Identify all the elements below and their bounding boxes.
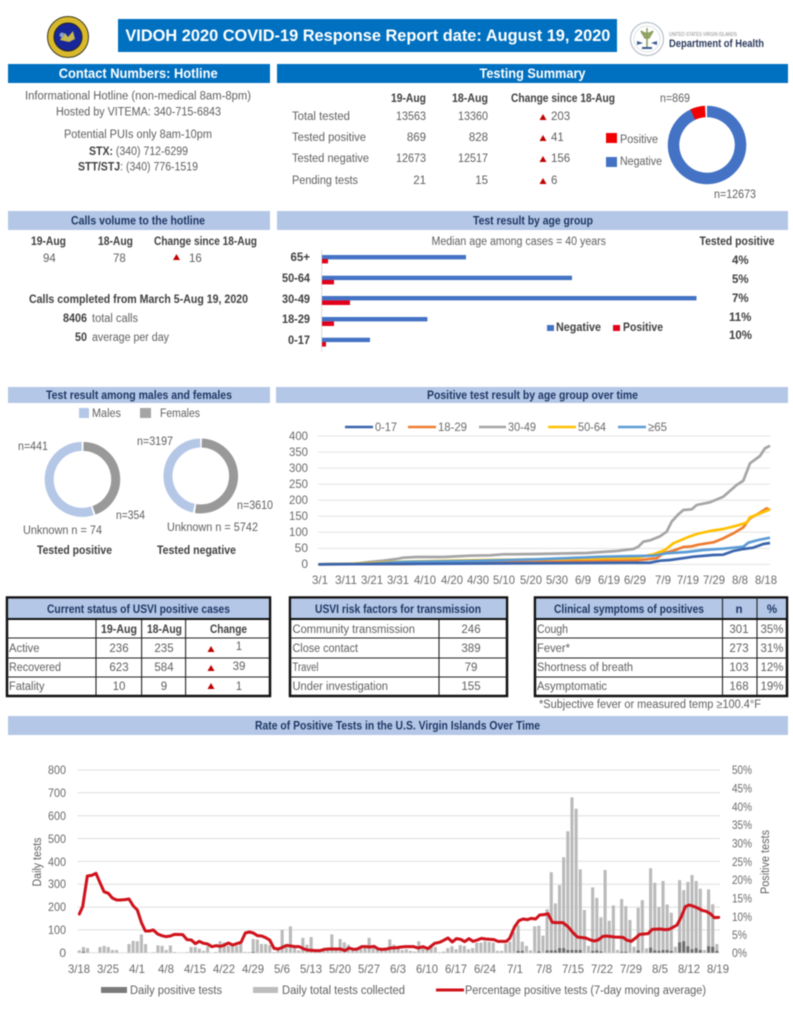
combo chart: daily tests and percent positive: 7/22 <box>591 962 613 976</box>
combo chart: daily tests and percent positive: 0% <box>732 946 747 960</box>
donut chart: tested positive: n=441 <box>18 441 48 453</box>
heading: positive by age over time: Positive test result by age group over time <box>427 390 638 402</box>
heading: males and females: Test result among males and females <box>46 390 232 402</box>
heading: contact numbers <box>8 64 270 83</box>
legend: positive and negative: Positive <box>620 134 658 146</box>
text block: calls completed: 50 <box>75 332 87 344</box>
combo chart: daily tests and percent positive: Daily tests <box>32 837 44 886</box>
table: USVI risk factors for transmission: Travel <box>292 662 318 674</box>
combo chart: daily tests and percent positive: 800 <box>48 763 66 777</box>
legend: sex: Females <box>160 408 200 420</box>
table: clinical symptoms of positives: 103 <box>729 662 749 674</box>
table: clinical symptoms of positives: Clinical symptoms of positives <box>554 604 704 616</box>
heading: males and females <box>8 387 270 403</box>
table: current status of USVI positive cases <box>7 598 270 696</box>
table: testing counts: 13563 <box>396 111 426 123</box>
legend: rate chart: Percentage positive tests (7-day moving average) <box>465 985 706 997</box>
table: current status of USVI positive cases: 10 <box>113 681 125 693</box>
heading: calls volume <box>8 211 270 230</box>
line chart: positives by age: 6/29 <box>624 573 646 587</box>
column: tested positive percentages: 5% <box>732 274 749 286</box>
table: clinical symptoms of positives: Asymptomatic <box>537 681 607 693</box>
combo chart: daily tests and percent positive: 50% <box>732 763 752 777</box>
bar chart: age groups: 50-64 <box>282 273 311 285</box>
table: USVI risk factors for transmission: Close contact <box>292 643 359 655</box>
table: current status of USVI positive cases: 236 <box>109 643 129 655</box>
legend: age groups: 0-17 <box>375 420 397 434</box>
column: tested positive percentages: 4% <box>732 255 749 267</box>
table: clinical symptoms of positives: 31% <box>760 643 784 655</box>
combo chart: daily tests and percent positive: 8/5 <box>652 962 668 976</box>
legend: age groups: 50-64 <box>578 420 606 434</box>
combo chart: daily tests and percent positive: 7/8 <box>536 962 552 976</box>
line chart: positives by age: 3/1 <box>312 573 328 587</box>
table: clinical symptoms of positives <box>535 597 787 696</box>
bar chart: age groups: Negative <box>556 322 601 334</box>
combo chart: daily tests and percent positive: 7/29 <box>620 962 642 976</box>
line chart: positives by age: 4/10 <box>414 573 436 587</box>
table: current status of USVI positive cases: Recovered <box>9 662 61 674</box>
combo chart: daily tests and percent positive: 8/12 <box>678 962 700 976</box>
combo chart: daily tests and percent positive: 500 <box>48 832 66 846</box>
combo chart: daily tests and percent positive: 20% <box>732 873 752 887</box>
combo chart: daily tests and percent positive: 6/10 <box>416 962 438 976</box>
table: clinical symptoms of positives: n <box>735 604 743 616</box>
line chart: positives by age: 8/8 <box>732 573 748 587</box>
legend: sex: Males <box>92 408 121 420</box>
heading: rate of positive tests <box>8 716 788 735</box>
table: testing counts: 6 <box>551 175 557 187</box>
legend: rate chart: Daily total tests collected <box>282 985 405 997</box>
table: daily calls: 19-Aug <box>31 236 66 248</box>
combo chart: daily tests and percent positive: 100 <box>48 923 66 937</box>
icon: left government seal <box>48 16 88 58</box>
text block: calls completed: average per day <box>92 332 169 344</box>
icon: Department of Health logo: UNITED STATES VIRGIN ISLANDS <box>669 32 738 38</box>
combo chart: daily tests and percent positive: 4/29 <box>242 962 264 976</box>
legend: rate chart: Daily positive tests <box>130 985 222 997</box>
column: tested positive percentages: 10% <box>729 330 752 342</box>
table: USVI risk factors for transmission: 155 <box>461 681 481 693</box>
table: testing counts: 41 <box>551 132 564 144</box>
text block: calls completed: total calls <box>92 313 138 325</box>
text block: calls completed: 8406 <box>63 313 87 325</box>
combo chart: daily tests and percent positive: 0 <box>59 946 66 960</box>
bar chart: age groups <box>282 250 696 352</box>
table: testing counts: 13360 <box>458 111 488 123</box>
table: daily calls: Change since 18-Aug <box>154 236 257 248</box>
panel: contact numbers hotline <box>8 64 270 174</box>
table: current status of USVI positive cases: Active <box>9 643 40 655</box>
text block: hotline numbers: STT/STJ: (340) 776-1519 <box>78 162 198 174</box>
table: current status of USVI positive cases: 1 <box>236 641 242 653</box>
line chart: positives by age: 4/30 <box>467 573 489 587</box>
line chart: positives by age: 5/20 <box>520 573 542 587</box>
combo chart: daily tests and percent positive: 7/15 <box>562 962 584 976</box>
combo chart: daily tests and percent positive: 30% <box>732 836 752 850</box>
table: testing counts <box>292 93 615 187</box>
combo chart: daily tests and percent positive: 700 <box>48 786 66 800</box>
table: current status of USVI positive cases: 623 <box>109 662 129 674</box>
bar chart: age groups: 0-17 <box>288 335 310 347</box>
line chart: positives by age: 4/20 <box>441 573 463 587</box>
combo chart: daily tests and percent positive: 45% <box>732 782 752 796</box>
bar chart: age groups: 65+ <box>290 252 310 264</box>
table: testing counts: Pending tests <box>292 175 358 187</box>
donut chart: tested positive: Tested positive <box>37 545 112 557</box>
table: daily calls: 94 <box>43 253 56 265</box>
table: current status of USVI positive cases: 235 <box>154 643 174 655</box>
line chart: positives by age: 200 <box>289 493 308 507</box>
table: daily calls: 18-Aug <box>98 236 133 248</box>
combo chart: daily tests and percent positive: 300 <box>48 877 66 891</box>
line chart: positives by age: 8/18 <box>755 573 777 587</box>
text block: hotline numbers <box>25 90 251 174</box>
table: testing counts: 828 <box>469 132 488 144</box>
title banner <box>118 19 617 52</box>
table: testing counts: Tested negative <box>292 153 369 165</box>
panel: rate of positive tests over time <box>8 716 788 997</box>
column: tested positive percentages: 7% <box>732 293 749 305</box>
combo chart: daily tests and percent positive: 4/1 <box>129 962 145 976</box>
heading: calls volume: Calls volume to the hotline <box>71 216 205 228</box>
line chart: positives by age: 100 <box>289 525 308 539</box>
text block: hotline numbers: Hosted by VITEMA: 340-715-6843 <box>56 106 221 118</box>
icon: Department of Health logo: Department of Health <box>669 38 764 50</box>
table: testing counts: 15 <box>475 175 488 187</box>
combo chart: daily tests and percent positive: 4/22 <box>213 962 235 976</box>
heading: testing summary: Testing Summary <box>480 66 586 81</box>
heading: positive by age over time <box>276 387 788 403</box>
combo chart: daily tests and percent positive: 4/8 <box>158 962 174 976</box>
text block: hotline numbers: Informational Hotline (non-medical 8am-8pm) <box>25 90 251 102</box>
legend: age groups: ≥65 <box>648 420 667 434</box>
text block: calls completed <box>29 294 248 344</box>
table: daily calls <box>31 236 257 265</box>
table: clinical symptoms of positives: % <box>767 604 777 616</box>
text block: calls completed: Calls completed from March 5-Aug 19, 2020 <box>29 294 248 306</box>
line chart: positives by age: 3/21 <box>361 573 383 587</box>
donut chart: tested positive: n=354 <box>116 510 146 522</box>
table: clinical symptoms of positives: 19% <box>760 681 784 693</box>
combo chart: daily tests and percent positive: 15% <box>732 892 752 906</box>
bar chart: age groups: Positive <box>623 322 663 334</box>
combo chart: daily tests and percent positive: 400 <box>48 855 66 869</box>
combo chart: daily tests and percent positive: 6/24 <box>474 962 496 976</box>
table: current status of USVI positive cases: 19-Aug <box>101 624 137 636</box>
line chart: positives by age: 150 <box>289 509 308 523</box>
table: current status of USVI positive cases: Fatality <box>9 681 45 693</box>
column: tested positive percentages: 11% <box>729 312 751 324</box>
line chart: positives by age: 7/9 <box>655 573 671 587</box>
line chart: positives by age: 350 <box>289 445 308 459</box>
line chart: positives by age: 5/10 <box>493 573 515 587</box>
table: testing counts: 21 <box>413 175 426 187</box>
bar chart: age groups: 18-29 <box>282 314 310 326</box>
table: testing counts: 203 <box>551 111 570 123</box>
panel: test result by age group <box>277 211 788 352</box>
combo chart: daily tests and percent positive: 3/18 <box>68 962 90 976</box>
icon: Department of Health logo <box>630 22 764 56</box>
table: USVI risk factors for transmission: 389 <box>461 643 481 655</box>
combo chart: daily tests and percent positive: 5/20 <box>329 962 351 976</box>
table: current status of USVI positive cases: 18-Aug <box>147 624 182 636</box>
table: clinical symptoms of positives: 273 <box>729 643 749 655</box>
table: testing counts: 19-Aug <box>391 93 426 105</box>
table: testing counts: Change since 18-Aug <box>511 93 615 105</box>
donut chart: tested negative: Tested negative <box>157 545 236 557</box>
panel: calls volume to the hotline <box>8 211 270 344</box>
legend: age groups: 18-29 <box>438 420 467 434</box>
table: daily calls: 78 <box>113 253 126 265</box>
line chart: positives by age: 400 <box>289 429 308 443</box>
heading: test result by age <box>277 211 788 230</box>
panel: testing summary <box>277 64 788 201</box>
legend: age groups: 30-49 <box>508 420 536 434</box>
table: current status of USVI positive cases: 584 <box>154 662 174 674</box>
combo chart: daily tests and percent positive: 3/25 <box>97 962 119 976</box>
table: USVI risk factors for transmission <box>290 598 507 696</box>
line chart: positives by age: 7/29 <box>703 573 725 587</box>
title banner: VIDOH 2020 COVID-19 Response Report date: August 19, 2020 <box>125 26 610 45</box>
panel: positive test result by age group over time <box>276 387 788 587</box>
donut chart: test results: n=12673 <box>714 189 756 201</box>
combo chart: daily tests and percent positive: 5/27 <box>358 962 380 976</box>
line chart: positives by age: 6/9 <box>575 573 591 587</box>
table: current status of USVI positive cases: 1 <box>236 681 242 693</box>
text block: hotline numbers: Potential PUIs only 8am-10pm <box>64 129 212 141</box>
table: testing counts: 12517 <box>458 153 488 165</box>
combo chart: daily tests and percent positive: 600 <box>48 809 66 823</box>
table: testing counts: 869 <box>407 132 426 144</box>
combo chart: daily tests and percent positive: 7/1 <box>507 962 523 976</box>
line chart: positives by age: 6/19 <box>598 573 620 587</box>
line chart: positives by age: 50 <box>295 541 308 555</box>
table: current status of USVI positive cases: 39 <box>233 661 245 673</box>
table: USVI risk factors for transmission: Under investigation <box>292 681 388 693</box>
table: clinical symptoms of positives: 301 <box>729 624 749 636</box>
text block: hotline numbers: STX: (340) 712-6299 <box>89 146 188 158</box>
table: USVI risk factors for transmission: 79 <box>465 662 477 674</box>
line chart: positives by age: 300 <box>289 461 308 475</box>
legend: positive and negative: Negative <box>620 156 662 168</box>
combo chart: daily tests and percent positive: Positive tests <box>760 830 772 894</box>
table: USVI risk factors for transmission: 246 <box>461 624 481 636</box>
footnote: fever definition: *Subjective fever or measured temp ≥100.4°F <box>539 699 761 711</box>
combo chart: daily tests and percent positive: 6/3 <box>390 962 406 976</box>
donut chart: test results <box>660 93 756 201</box>
table: daily calls: 16 <box>189 253 202 265</box>
legend: positive and negative <box>606 133 662 168</box>
table: clinical symptoms of positives: Cough <box>537 624 568 636</box>
table: current status of USVI positive cases: 9 <box>161 681 167 693</box>
heading: rate of positive tests: Rate of Positive Tests in the U.S. Virgin Islands Over Time <box>255 720 540 732</box>
table: clinical symptoms of positives: Fever* <box>537 643 571 655</box>
bar chart: age groups: 30-49 <box>282 294 310 306</box>
line chart: positives by age: 7/19 <box>677 573 699 587</box>
heading: test result by age: Test result by age group <box>473 216 593 228</box>
combo chart: daily tests and percent positive: 200 <box>48 900 66 914</box>
combo chart: daily tests and percent positive: 5/6 <box>274 962 290 976</box>
legend: age groups <box>345 420 667 434</box>
line chart: positives by age: 3/11 <box>335 573 357 587</box>
table: testing counts: Tested positive <box>292 132 366 144</box>
line chart: positives by age: 5/30 <box>546 573 568 587</box>
table: testing counts: 12673 <box>396 153 426 165</box>
combo chart: daily tests and percent positive: 6/17 <box>445 962 467 976</box>
panel: males and females <box>8 387 273 557</box>
heading: contact numbers: Contact Numbers: Hotline <box>59 66 218 81</box>
table: USVI risk factors for transmission: Community transmission <box>292 624 415 636</box>
donut chart: tested negative <box>137 436 273 557</box>
table: clinical symptoms of positives: Shortness of breath <box>537 662 633 674</box>
column: tested positive percentages: Tested positive <box>700 236 774 248</box>
table: USVI risk factors for transmission: USVI risk factors for transmission <box>315 604 481 616</box>
combo chart: daily tests and percent positive: 5/13 <box>300 962 322 976</box>
legend: sex <box>79 408 200 420</box>
table: clinical symptoms of positives: 35% <box>760 624 784 636</box>
line chart: positives by age: 250 <box>289 477 308 491</box>
table: current status of USVI positive cases: Current status of USVI positive cases <box>47 604 230 616</box>
donut chart: test results: n=869 <box>660 93 690 105</box>
donut chart: tested negative: Unknown n = 5742 <box>167 522 258 534</box>
combo chart: daily tests and percent positive: 35% <box>732 818 752 832</box>
combo chart: daily tests and percent positive: 4/15 <box>184 962 206 976</box>
combo chart: daily tests and percent positive: 40% <box>732 800 752 814</box>
table: clinical symptoms of positives: 12% <box>760 662 784 674</box>
column: tested positive percentages <box>700 236 774 342</box>
table: testing counts: 18-Aug <box>452 93 488 105</box>
combo chart: daily tests and percent positive <box>32 763 772 976</box>
line chart: positives by age: 3/31 <box>387 573 409 587</box>
donut chart: tested negative: n=3610 <box>237 500 273 512</box>
combo chart: daily tests and percent positive: 25% <box>732 855 752 869</box>
donut chart: tested positive <box>18 441 146 557</box>
table: clinical symptoms of positives: 168 <box>729 681 749 693</box>
combo chart: daily tests and percent positive: 10% <box>732 910 752 924</box>
combo chart: daily tests and percent positive: 8/19 <box>707 962 729 976</box>
combo chart: daily tests and percent positive: 5% <box>732 928 747 942</box>
line chart: positives by age: 0 <box>301 557 308 571</box>
heading: testing summary <box>277 64 788 83</box>
text block: median age: Median age among cases = 40 years <box>432 236 606 248</box>
donut chart: tested positive: Unknown n = 74 <box>23 525 103 537</box>
donut chart: tested negative: n=3197 <box>137 436 173 448</box>
legend: rate chart <box>101 985 706 997</box>
table: testing counts: 156 <box>551 153 570 165</box>
line chart: positives by age <box>289 429 777 587</box>
table: current status of USVI positive cases: Change <box>210 624 247 636</box>
table: testing counts: Total tested <box>292 111 350 123</box>
